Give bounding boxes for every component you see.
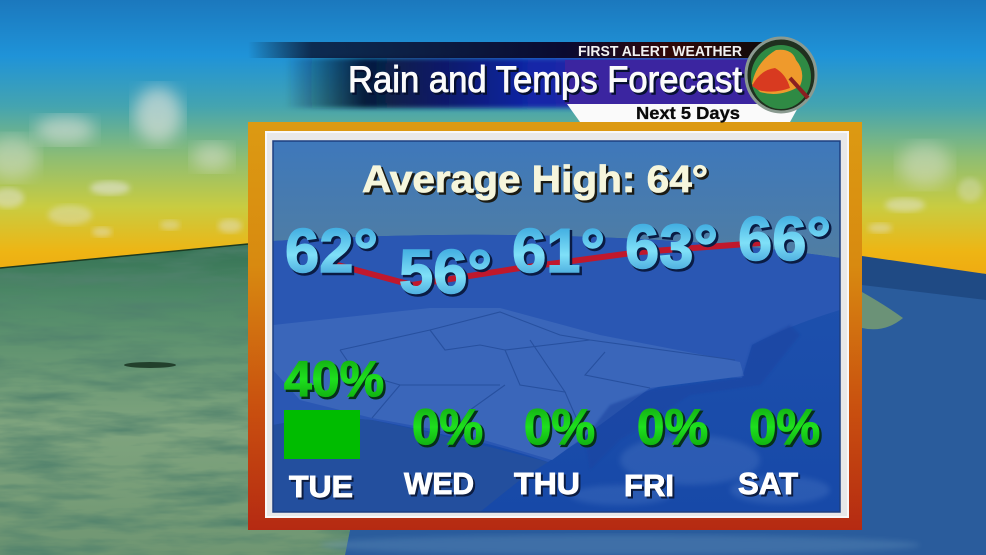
state borders [340, 312, 735, 438]
sea speckle [570, 435, 830, 505]
day: Thursday: THU [516, 468, 582, 503]
day: Thursday: THU [514, 466, 580, 501]
day: Tuesday: TUE [289, 469, 353, 504]
panel white border [266, 132, 848, 517]
map land [273, 235, 840, 462]
banner tab: next 5 days: Next 5 Days [636, 103, 740, 123]
temp: Friday: 63° [625, 213, 718, 282]
temp: Thursday: 61° [514, 219, 607, 288]
ocean on the globe [340, 260, 986, 555]
banner title: Rain and Temps Forecast [350, 61, 745, 102]
day: Friday: FRI [624, 468, 674, 503]
temp: Wednesday: 56° [399, 238, 492, 307]
map sea [273, 235, 840, 512]
rain percentages [284, 351, 822, 457]
banner eyebrow: FIRST ALERT WEATHER [578, 43, 742, 60]
sky background [0, 0, 986, 280]
banner body [285, 58, 780, 108]
banner title: Rain and Temps Forecast [348, 59, 743, 100]
land on the globe [0, 236, 420, 555]
panel frame [248, 122, 862, 530]
rain: Tuesday: 40% [284, 351, 384, 407]
rain: Thursday: 0% [526, 401, 597, 457]
rain: Wednesday: 0% [414, 401, 485, 457]
rain: Friday: 0% [639, 401, 710, 457]
temp: Tuesday: 62° [287, 219, 380, 288]
rain: Thursday: 0% [524, 399, 595, 455]
ocean horizon on the right [862, 256, 986, 300]
banner tab: next 5 days [567, 103, 800, 123]
rain: Wednesday: 0% [412, 399, 483, 455]
temperature line [330, 243, 760, 285]
forecast panel [248, 122, 862, 530]
day: Wednesday: WED [406, 468, 476, 503]
map [273, 141, 840, 512]
rain bar: Tuesday [284, 410, 360, 459]
banner top strip [248, 42, 778, 58]
day labels [289, 466, 800, 506]
heading: average high: Average High: 64° [364, 161, 710, 203]
temp: Tuesday: 62° [285, 217, 378, 286]
rain: Friday: 0% [637, 399, 708, 455]
temperatures [285, 205, 833, 309]
day: Saturday: SAT [740, 468, 800, 503]
temp: Saturday: 66° [740, 207, 833, 276]
temp: Wednesday: 56° [401, 240, 494, 309]
title banner [248, 38, 816, 123]
day: Tuesday: TUE [291, 471, 355, 506]
rain: Saturday: 0% [749, 399, 820, 455]
icon: radar globe [746, 38, 816, 112]
rain: Tuesday: 40% [286, 353, 386, 409]
day: Wednesday: WED [404, 466, 474, 501]
temp: Saturday: 66° [738, 205, 831, 274]
day: Friday: FRI [626, 470, 676, 505]
heading: average high: Average High: 64° [362, 159, 708, 201]
day: Saturday: SAT [738, 466, 798, 501]
temp: Friday: 63° [627, 215, 720, 284]
rain: Saturday: 0% [751, 401, 822, 457]
clouds [0, 87, 982, 237]
temp: Thursday: 61° [512, 217, 605, 286]
